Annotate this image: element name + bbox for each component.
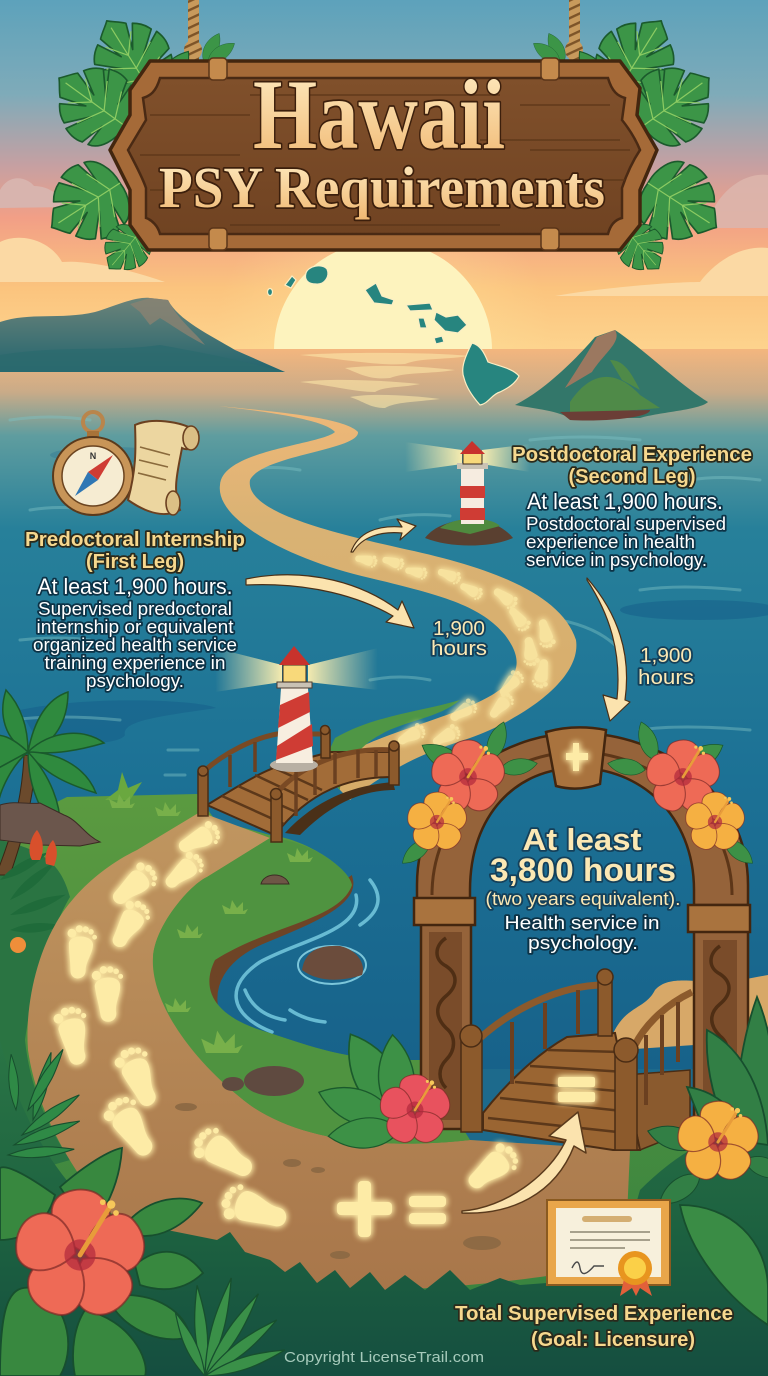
arrow into bridge [462,1112,586,1213]
left land [0,794,768,1376]
small orange flower [10,937,26,953]
text: postdoctoral experience: At least 1,900 hours. [527,489,723,514]
glowing footprints on the road [354,552,557,751]
text: predoctoral internship: training experience in [44,653,226,673]
arrow to first leg [246,575,414,628]
grass rocks [222,1066,304,1096]
text: total hours in arch: 3,800 hours [490,852,676,888]
scroll [128,421,199,515]
path pebbles [175,1103,501,1259]
label: 1,900 hours second: 1,900 [640,645,692,667]
text: postdoctoral experience: Postdoctoral supervised [526,514,726,534]
wooden sign board [110,58,657,250]
text: goal: (Goal: Licensure) [531,1329,695,1351]
right pillar [694,931,748,1131]
certificate [547,1200,670,1296]
orange hibiscus bottom right [674,1101,763,1186]
arch flower leaves [313,719,757,1151]
title: PSY Requirements [159,155,605,220]
large footprints along the path [52,818,524,1236]
right pillar cap [688,905,750,932]
jungle foreground [0,1040,768,1376]
sun glitter [300,353,470,408]
plus and equals symbols [337,1181,446,1237]
sea [0,349,768,1069]
text: postdoctoral experience: service in psychology. [526,550,707,570]
sun glow [213,175,553,515]
bottom left leaves [0,1148,203,1376]
text: total hours in arch: Health service in [504,913,660,933]
red ginger flowers [29,830,57,866]
text: goal: Total Supervised Experience [455,1303,733,1325]
text: total hours in arch: psychology. [528,933,638,953]
label: 1,900 hours first: hours [431,638,487,660]
monstera leaves around sign [30,0,738,284]
bottom right foliage [645,997,768,1325]
left pillar cap [414,898,475,925]
sand road across the water [218,406,576,800]
wooden bridge into the arch [460,969,692,1150]
text: predoctoral internship: psychology. [86,671,184,691]
text: total hours in arch [486,822,680,953]
bridge one [198,726,399,842]
text: goal [455,1303,733,1351]
hibiscus top right of arch [643,740,723,817]
copyright: Copyright LicenseTrail.com [284,1349,484,1366]
grass tuft [105,772,142,800]
right pillar carving [703,940,737,1120]
arch inner band [432,752,732,895]
text: predoctoral internship: Supervised predoctoral [38,599,232,619]
text: total hours in arch: At least [522,822,642,857]
compass [53,412,133,515]
wooden sign ropes [184,0,583,66]
text: total hours in arch: (two years equivalent). [486,889,680,909]
text: postdoctoral experience: (Second Leg) [568,466,696,488]
right island [515,330,708,421]
lighthouse: postdoctoral [405,441,530,546]
keystone with plus [546,727,606,789]
orange hibiscus right of arch [682,792,748,854]
sky background [0,0,768,352]
sandy beach by the bridge [612,975,768,1050]
text: predoctoral internship: organized health service [33,635,237,655]
arrow to lighthouse [351,519,416,552]
label: 1,900 hours second [638,645,694,689]
river ripples [236,880,378,1032]
text: predoctoral internship: At least 1,900 hours. [38,574,232,599]
left pillar [421,924,471,1129]
orange hibiscus left of arch [404,792,470,854]
grass peninsula [153,838,470,1144]
label: 1,900 hours second: hours [638,667,694,689]
lighthouse: predoctoral [215,646,378,772]
green shore strip [320,700,460,790]
river rock [298,946,366,984]
shoreline rocks [0,803,100,846]
compass: N [90,451,96,461]
large hibiscus bottom left [9,1190,151,1325]
title: Hawaii [253,59,505,170]
palm tree [0,690,104,875]
map of Hawaiian islands [268,266,519,405]
arrow to arch [587,578,630,721]
carved arch curve [417,733,748,905]
title [159,59,605,220]
water shadows [20,447,768,745]
river bank cliff [205,880,350,1018]
label: 1,900 hours first: 1,900 [433,618,485,640]
grass tufts on peninsula [109,794,313,1053]
arch of the goal [414,727,750,1131]
text: postdoctoral experience: experience in health [526,532,695,552]
left ferns [0,848,67,935]
label: 1,900 hours first [431,618,487,660]
equals on bridge [558,1077,595,1102]
dark left verge [0,840,70,1180]
text: predoctoral internship: internship or equivalent [36,617,234,637]
text: predoctoral internship: (First Leg) [86,551,184,573]
text: predoctoral internship [25,529,245,691]
left pillar carving [429,932,462,1120]
sun [274,241,492,350]
left feather fern [7,1047,82,1160]
text: predoctoral internship: Predoctoral Internship [25,529,245,551]
hibiscus top left of arch [428,740,508,817]
left mountain [0,298,285,372]
pink hibiscus by bridge [377,1075,454,1148]
small stone on grass [261,875,289,884]
text: postdoctoral experience [512,444,752,570]
text: postdoctoral experience: Postdoctoral Experience [512,444,752,466]
water ripples [10,417,760,775]
bottom palm fronds [170,1276,287,1376]
clouds [0,175,768,296]
brown path on land [27,812,630,1291]
